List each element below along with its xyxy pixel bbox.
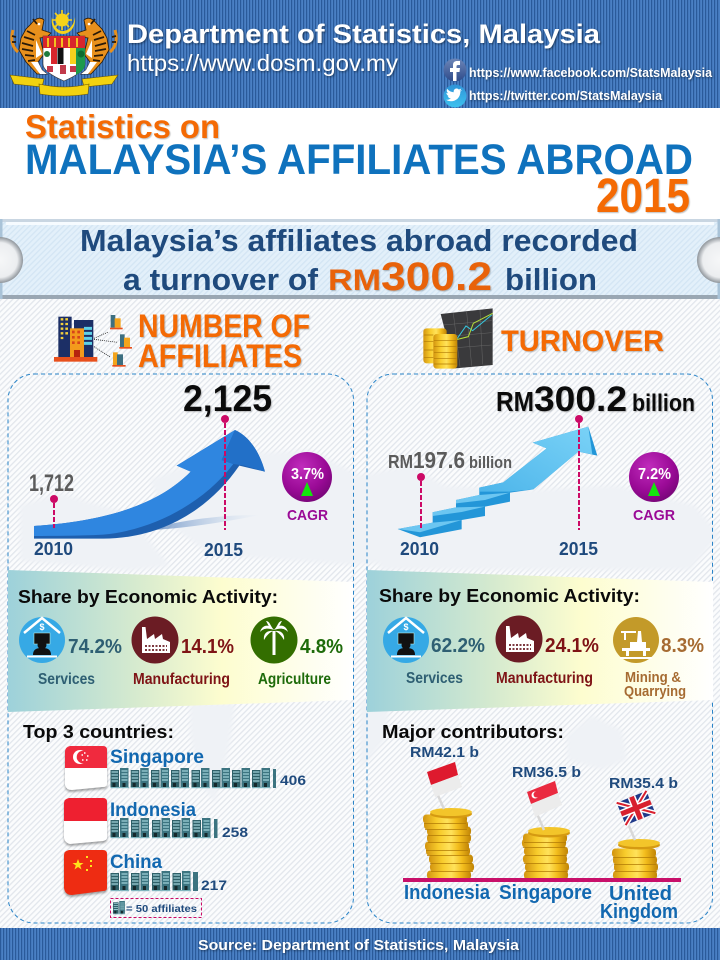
heading: turnover: TURNOVER xyxy=(501,325,664,358)
footer bar xyxy=(0,928,720,960)
icon: coins and chart xyxy=(423,308,493,369)
banner line 2: 300.2 xyxy=(381,255,492,299)
callout: cagr 3.7%: CAGR xyxy=(287,507,328,524)
baseline xyxy=(403,878,681,882)
activity: services: 62.2% xyxy=(431,635,485,657)
title block xyxy=(25,108,693,223)
callout: cagr 3.7%: 3.7% xyxy=(291,466,324,483)
heading: share: Share by Economic Activity: xyxy=(18,587,278,607)
summary banner xyxy=(0,219,720,299)
year 2015: 2015 xyxy=(204,540,243,560)
heading: top 3: Top 3 countries: xyxy=(23,722,174,742)
row: china: China xyxy=(110,852,162,873)
title: statistics on: Statistics on xyxy=(25,108,220,145)
activity: mining and quarrying: Mining & xyxy=(625,669,681,686)
banner line 2: RM xyxy=(328,264,381,297)
banner line 2: a turnover of xyxy=(123,262,319,297)
value rm300.2 billion: billion xyxy=(632,390,695,417)
value rm300.2 billion xyxy=(496,380,695,419)
heading: share: Share by Economic Activity: xyxy=(379,586,640,606)
coin stack: indonesia xyxy=(423,808,474,880)
activity: manufacturing xyxy=(132,616,234,688)
coin stack: singapore xyxy=(522,827,570,880)
value 1,712: 1,712 xyxy=(29,470,74,497)
website url: https://www.dosm.gov.my xyxy=(127,50,399,76)
legend: = 50 affiliates xyxy=(126,904,197,915)
title: malaysia's affiliates abroad: MALAYSIA’S AFFILIATES ABROAD xyxy=(25,136,693,184)
activity: agriculture: Agriculture xyxy=(258,671,331,688)
callout: cagr 3.7% xyxy=(282,452,332,524)
activity: services: 74.2% xyxy=(68,636,122,658)
icon: facebook xyxy=(444,58,466,82)
source: Source: Department of Statistics, Malaysia xyxy=(198,937,520,954)
value rm300.2 billion: RM xyxy=(496,386,534,417)
row: indonesia xyxy=(64,798,248,844)
marker 2010 xyxy=(50,495,58,528)
major contributors xyxy=(382,722,681,923)
legend xyxy=(110,898,202,918)
panel: turnover xyxy=(367,308,713,923)
value rm300.2 billion: 300.2 xyxy=(534,380,627,419)
value: singapore: RM36.5 b xyxy=(512,764,581,781)
top 3 countries xyxy=(23,722,306,918)
heading: number of affiliates xyxy=(138,308,310,374)
activity: mining and quarrying: 8.3% xyxy=(661,635,704,657)
activity: manufacturing: Manufacturing xyxy=(133,671,230,688)
activity: manufacturing: 24.1% xyxy=(545,635,599,657)
label: indonesia: Indonesia xyxy=(404,882,491,904)
activity: agriculture: 4.8% xyxy=(300,636,343,658)
label: united kingdom xyxy=(600,883,678,923)
row: china xyxy=(64,850,227,895)
coin stack: united kingdom xyxy=(612,839,660,880)
banner line 1: Malaysia’s affiliates abroad recorded xyxy=(80,223,638,258)
callout: cagr 7.2%: CAGR xyxy=(633,507,675,524)
value: indonesia: RM42.1 b xyxy=(410,744,479,761)
value: united kingdom: RM35.4 b xyxy=(609,775,678,792)
flag: indonesia xyxy=(427,762,462,809)
activity: services: Services xyxy=(406,670,463,687)
activity: mining and quarrying: Quarrying xyxy=(624,683,686,700)
lower hatched background with world map xyxy=(0,299,720,928)
activity: manufacturing xyxy=(496,616,599,687)
share by economic activity band xyxy=(367,570,713,712)
row: indonesia: Indonesia xyxy=(110,800,196,821)
heading: number of affiliates: NUMBER OF xyxy=(138,308,310,344)
activity: agriculture xyxy=(250,616,343,688)
flag: singapore xyxy=(527,781,562,830)
activity: manufacturing: 14.1% xyxy=(181,636,234,658)
callout: cagr 7.2% xyxy=(629,452,679,524)
facebook url: https://www.facebook.com/StatsMalaysia xyxy=(469,66,713,80)
chart: turnover stair arrow xyxy=(388,380,695,559)
flag: united kingdom xyxy=(617,791,655,840)
header title: Department of Statistics, Malaysia xyxy=(127,19,601,49)
row: indonesia: 258 xyxy=(222,824,248,840)
activity: services: Services xyxy=(38,671,95,688)
marker 2015 xyxy=(575,415,583,530)
label: united kingdom: United xyxy=(609,883,672,905)
year 2010: 2010 xyxy=(400,539,439,559)
marker 2015 xyxy=(221,415,229,530)
heading: number of affiliates: AFFILIATES xyxy=(138,338,302,374)
value rm197.6 billion: 197.6 xyxy=(413,447,465,473)
banner line 2 xyxy=(123,255,597,299)
value rm197.6 billion: RM xyxy=(388,452,413,472)
year 2010: 2010 xyxy=(34,539,73,559)
value rm197.6 billion xyxy=(388,447,512,473)
activity: mining and quarrying xyxy=(613,617,704,700)
value 2,125: 2,125 xyxy=(183,378,272,419)
row: singapore xyxy=(65,746,306,790)
coat of arms emblem xyxy=(10,10,118,96)
panel: number of affiliates xyxy=(8,308,354,923)
icon: twitter xyxy=(444,84,466,108)
marker 2010 xyxy=(417,473,425,530)
heading: major contributors: Major contributors: xyxy=(382,722,564,742)
activity: manufacturing: Manufacturing xyxy=(496,670,593,687)
callout: cagr 7.2%: 7.2% xyxy=(638,466,671,483)
banner line 2: billion xyxy=(505,262,597,297)
year 2015: 2015 xyxy=(559,539,598,559)
icon: buildings with arrows xyxy=(54,315,132,367)
activity: services xyxy=(383,617,485,687)
title: year: 2015 xyxy=(596,170,690,223)
activity: services xyxy=(19,617,122,688)
header bar xyxy=(0,0,720,108)
share by economic activity band xyxy=(8,570,353,712)
twitter url: https://twitter.com/StatsMalaysia xyxy=(469,89,663,103)
row: singapore: Singapore xyxy=(110,747,204,768)
label: united kingdom: Kingdom xyxy=(600,901,678,923)
label: singapore: Singapore xyxy=(499,882,592,904)
chart: affiliates growth arrow xyxy=(29,378,272,560)
row: china: 217 xyxy=(201,877,227,893)
row: singapore: 406 xyxy=(280,772,306,788)
value rm197.6 billion: billion xyxy=(469,453,512,472)
